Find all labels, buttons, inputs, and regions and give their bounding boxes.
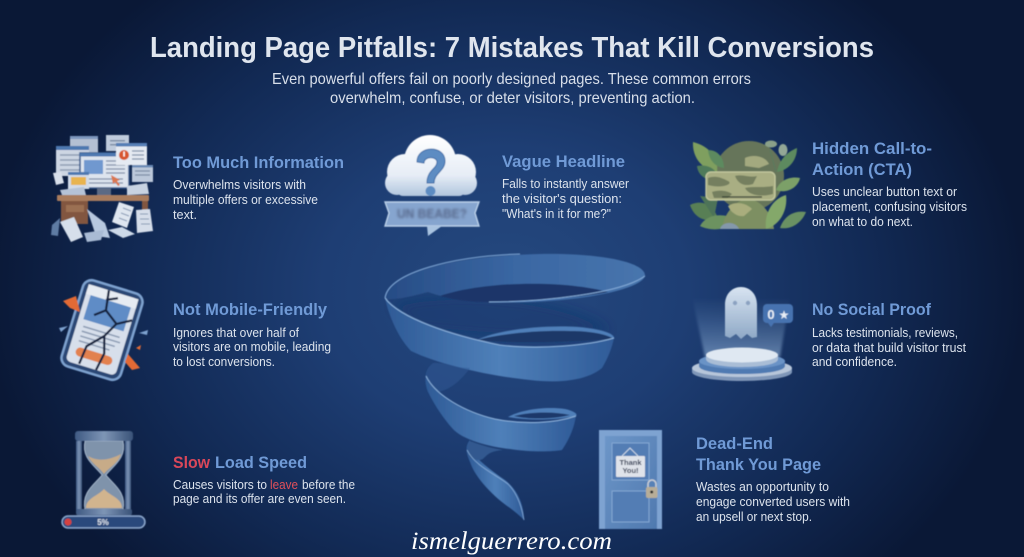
description: text.: [173, 207, 197, 222]
heading: Load Speed: [215, 453, 307, 472]
subtitle: overwhelm, confuse, or deter visitors, preventing action.: [330, 90, 695, 107]
description: page and its offer are even seen.: [173, 491, 346, 506]
heading: Not Mobile-Friendly: [173, 300, 328, 319]
description: [173, 325, 331, 369]
description: the visitor's question:: [502, 191, 622, 206]
description: Wastes an opportunity to: [696, 479, 829, 494]
heading: Slow: [173, 453, 211, 472]
icon: ghost on podium: ★: [779, 308, 789, 322]
panel: too much information: [51, 135, 344, 242]
heading: Hidden Call-to-: [812, 139, 932, 158]
icon: camouflaged button: [690, 140, 806, 229]
panel: slow load speed: [62, 431, 355, 528]
icon: cluttered desk: [51, 135, 153, 242]
description: [173, 477, 355, 506]
description: [173, 177, 318, 222]
description: [502, 176, 630, 221]
description: [696, 479, 850, 524]
icon: ghost on podium: 0: [767, 307, 775, 322]
icon: hourglass: [62, 431, 145, 528]
description: [812, 325, 966, 369]
description: Falls to instantly answer: [502, 176, 630, 191]
description: before the: [302, 477, 355, 492]
heading: Action (CTA): [812, 160, 912, 179]
heading: No Social Proof: [812, 300, 931, 319]
heading: Vague Headline: [502, 152, 625, 171]
heading: [812, 139, 932, 179]
central tornado funnel: [385, 254, 645, 520]
description: "What's in it for me?": [502, 206, 611, 221]
description: Overwhelms visitors with: [173, 177, 306, 192]
description: Causes visitors to: [173, 477, 267, 492]
description: Ignores that over half of: [173, 325, 299, 340]
description: multiple offers or excessive: [173, 192, 318, 207]
icon: locked door: [599, 430, 662, 529]
icon: locked door: You!: [622, 466, 639, 475]
icon: cracked phone: [59, 278, 148, 382]
description: an upsell or next stop.: [696, 509, 812, 524]
description: on what to do next.: [812, 214, 913, 229]
description: visitors are on mobile, leading: [173, 339, 331, 354]
description: to lost conversions.: [173, 354, 275, 369]
subtitle: [272, 71, 751, 107]
panel: not mobile-friendly: [59, 278, 331, 382]
description: and confidence.: [812, 354, 897, 369]
footer website: ismelguerrero.com: [411, 528, 612, 555]
subtitle: Even powerful offers fail on poorly designed pages. These common errors: [272, 71, 751, 88]
description: placement, confusing visitors: [812, 199, 967, 214]
icon: locked door: Thank: [619, 458, 642, 467]
heading: Too Much Information: [173, 153, 344, 172]
heading: [696, 434, 821, 474]
heading: [173, 453, 307, 472]
heading: Thank You Page: [696, 455, 821, 474]
description: Uses unclear button text or: [812, 184, 958, 199]
description: or data that build visitor trust: [812, 340, 966, 355]
title: Landing Page Pitfalls: 7 Mistakes That Kill Conversions: [150, 32, 874, 64]
icon: cloud with question mark: [385, 135, 479, 236]
description: engage converted users with: [696, 494, 850, 509]
description: [812, 184, 967, 229]
panel: dead-end thank you page: [599, 430, 850, 529]
panel: hidden CTA: [690, 139, 967, 229]
icon: hourglass: 5%: [97, 518, 109, 527]
heading: Dead-End: [696, 434, 773, 453]
description: leave: [270, 477, 298, 492]
icon: ghost on podium: [692, 287, 793, 381]
panel: no social proof: [692, 287, 966, 381]
description: Lacks testimonials, reviews,: [812, 325, 958, 340]
icon: cloud with question mark: UN BEABE?: [397, 206, 467, 221]
panel: vague headline: [385, 135, 630, 236]
